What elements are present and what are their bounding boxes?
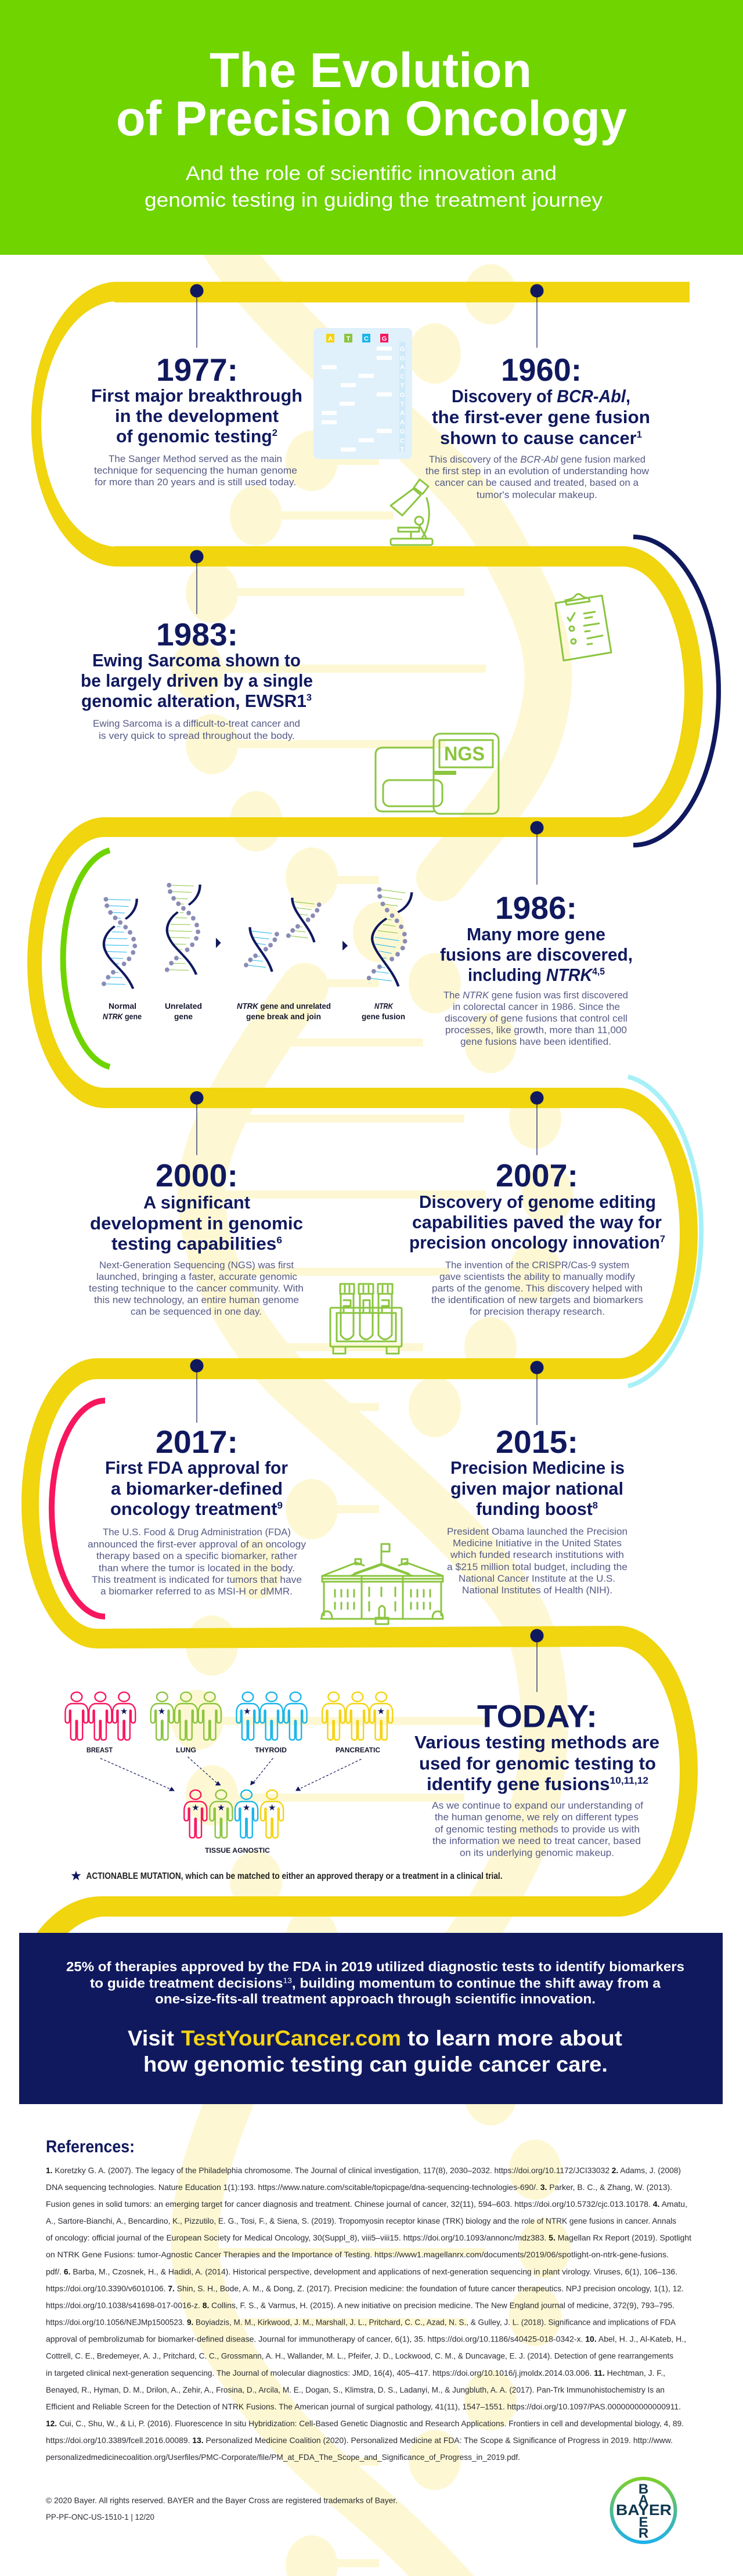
- diagram: NTRK gene fusion: Normal: [109, 1001, 136, 1011]
- references list: pdf/. 6. Barba, M., Czosnek, H., & Hadidi, A. (2014). Historical perspective, development and applications of next-generation sequencing in plant virology. Viruses, 6(1), 106–136.: [46, 2267, 677, 2276]
- references list: Benayed, R., Hyman, D. M., Drilon, A., Zehir, A., Frosina, D., Arcila, M. E., Dogan, S., Klimstra, D. S., Ladanyi, M., & Jungbluth, A. A. (2017). Pan-Trk Immunohistochemistry Is an: [46, 2385, 665, 2394]
- logo: Bayer: BAYER: [616, 2501, 672, 2519]
- panel: 2017: announced the first-ever approval of an oncology: [88, 1539, 306, 1550]
- references list: approval of pembrolizumab for biomarker-defined disease. Journal for immunotherapy of cancer, 6(1), 35. https://doi.org/10.1186/s40425-018-0342-x. 10. Abel, H. J., Al-Kateb, H.,: [46, 2335, 686, 2344]
- title: of Precision Oncology: [116, 91, 627, 146]
- icon: sequencing gel: C: [364, 335, 369, 342]
- accent arc: pink: [52, 1401, 105, 1617]
- panel: 1960: Discovery of BCR-Abl,: [452, 386, 630, 406]
- panel: 2017: than where the tumor is located in the body.: [99, 1563, 295, 1574]
- diagram: NTRK gene fusion: Unrelated: [165, 1001, 202, 1011]
- logo: Bayer: [612, 2478, 676, 2542]
- icon: sequencing gel: C: [400, 438, 405, 445]
- panel: 2015: Medicine Initiative in the United States: [453, 1538, 622, 1549]
- panel: 2007: capabilities paved the way for: [412, 1212, 662, 1232]
- panel: 1986: The NTRK gene fusion was first discovered: [443, 990, 628, 1001]
- panel: 1983: Ewing Sarcoma is a difficult-to-treat cancer and: [93, 719, 300, 729]
- panel: 2000: this new technology, an entire human genome: [94, 1295, 299, 1305]
- panel: 1977: [91, 352, 302, 488]
- panel: 1983: 3: [306, 692, 312, 703]
- references list: DNA sequencing technologies. Nature Education 1(1):193. https://www.nature.com/scitable/topicpage/dna-sequencing-technologies-690/. 3. Parker, B. C., & Zhang, W. (2013).: [46, 2182, 672, 2192]
- references list: Cottrell, C. E., Bredemeyer, A. J., Pritchard, C. C., Grossmann, A. H., Wallander, M. L., Pfeifer, J. D., Lockwood, C. M., & Duncavage, E. J. (2014). Detection of gene rearrangements: [46, 2351, 673, 2361]
- panel: 1960: the first step in an evolution of understanding how: [425, 466, 649, 477]
- footer legal text: [46, 2496, 398, 2521]
- panel: 2017: a biomarker referred to as MSI-H or dMMR.: [100, 1586, 293, 1597]
- panel: 1986: 4,5: [592, 966, 605, 977]
- panel: Today: identify gene fusions: [427, 1774, 607, 1794]
- diagram: NTRK gene fusion: gene: [174, 1012, 193, 1021]
- panel: Today: on its underlying genomic makeup.: [460, 1848, 614, 1859]
- panel: Today: used for genomic testing to: [419, 1753, 656, 1774]
- panel: 2015: which funded research institutions with: [450, 1550, 624, 1560]
- panel: 1977: The Sanger Method served as the main: [109, 454, 282, 464]
- panel: 2000: 2000:: [156, 1157, 238, 1193]
- footer legal text: © 2020 Bayer. All rights reserved. BAYER and the Bayer Cross are registered trademarks of Bayer.: [46, 2496, 398, 2505]
- icon: sequencing gel: G: [400, 392, 405, 399]
- panel: 2015: 8: [593, 1500, 598, 1511]
- panel: 1986: fusions are discovered,: [440, 944, 633, 965]
- panel: 2000: development in genomic: [90, 1213, 303, 1233]
- panel: 1960: cancer can be caused and treated, based on a: [435, 478, 639, 488]
- panel: 2007: gave scientists the ability to manually modify: [439, 1272, 636, 1282]
- diagram: tissue agnostic people: THYROID: [255, 1747, 287, 1754]
- panel: Today: of genomic testing methods to provide us with: [435, 1824, 640, 1835]
- icon: sequencing gel: A: [400, 410, 405, 417]
- panel: Today: 10,11,12: [610, 1775, 648, 1786]
- diagram: NTRK gene fusion: [102, 883, 412, 1021]
- references list: https://doi.org/10.1056/NEJMp1500523. 9. Boyiadzis, M. M., Kirkwood, J. M., Marshall, J. L., Pritchard, C. C., Azad, N. S., & Gulley, J. L. (2018). Significance and implications of FDA: [46, 2317, 676, 2326]
- panel: 1977: of genomic testing: [116, 426, 276, 446]
- panel: 2000: [89, 1157, 304, 1317]
- panel: 2017: a biomarker-defined: [111, 1478, 283, 1499]
- icon: sequencing gel: T: [401, 401, 405, 408]
- panel: 2007: parts of the genome. This discovery helped with: [432, 1283, 643, 1294]
- accent arc: cyan: [628, 1077, 701, 1386]
- panel: 1960: the first-ever gene fusion: [432, 407, 650, 427]
- diagram: tissue agnostic people: TISSUE AGNOSTIC: [205, 1848, 270, 1855]
- panel: 1986: gene fusions have been identified.: [460, 1037, 611, 1047]
- icon: NGS sequencer: NGS: [444, 743, 485, 765]
- diagram: tissue agnostic people: PANCREATIC: [336, 1747, 380, 1754]
- callout: navy banner: how genomic testing can guide cancer care.: [143, 2052, 608, 2076]
- callout: navy banner: 13: [283, 1976, 292, 1985]
- icon: test tube rack: [330, 1284, 402, 1354]
- icon: sequencing gel: T: [347, 335, 351, 342]
- icon: sequencing gel: A: [400, 364, 405, 371]
- callout: navy banner: to learn more about: [407, 2026, 622, 2050]
- panel: 2015: Precision Medicine is: [450, 1457, 625, 1478]
- panel: Today: TODAY:: [477, 1698, 597, 1734]
- panel: 2007: 2007:: [496, 1157, 578, 1193]
- panel: 2000: launched, bringing a faster, accurate genomic: [96, 1272, 297, 1282]
- panel: 2017: 2017:: [156, 1424, 238, 1460]
- background DNA helix: [171, 232, 574, 2576]
- references list: Fusion genes in solid tumors: an emerging target for cancer diagnosis and treatment. Chinese journal of cancer, 32(11), 594–603. https://doi.org/10.5732/cjc.013.10178. 4. Amatu,: [46, 2199, 687, 2209]
- panel: 2000: Next-Generation Sequencing (NGS) was first: [99, 1260, 294, 1271]
- logo: Bayer: E: [639, 2514, 648, 2530]
- diagram: NTRK gene fusion: NTRK gene and unrelated: [237, 1001, 331, 1011]
- subtitle: genomic testing in guiding the treatment journey: [145, 189, 603, 211]
- references list: Efficient and Reliable Screen for the Detection of NTRK Fusions. The American journal of surgical pathology, 41(11), 1547–1551. https://doi.org/10.1097/PAS.0000000000000911.: [46, 2402, 681, 2411]
- subtitle: And the role of scientific innovation and: [186, 163, 557, 185]
- icon: sequencing gel: A: [400, 419, 405, 426]
- panel: 1983: be largely driven by a single: [81, 670, 313, 691]
- icon: White House: [321, 1544, 443, 1624]
- references list: 1. Koretzky G. A. (2007). The legacy of the Philadelphia chromosome. The Journal of clinical investigation, 117(8), 2030–2032. https://doi.org/10.1172/JCI33032 2. Adams, J. (2008): [46, 2166, 681, 2175]
- panel: 2015: funding boost: [476, 1499, 596, 1519]
- panel: Today: [414, 1698, 659, 1859]
- panel: Today: Various testing methods are: [414, 1732, 659, 1752]
- panel: Today: As we continue to expand our understanding of: [432, 1801, 643, 1811]
- footer legal text: PP-PF-ONC-US-1510-1 | 12/20: [46, 2512, 154, 2521]
- icon: sequencing gel: A: [328, 335, 333, 342]
- panel: 1986: discovery of gene fusions that control cell: [445, 1013, 627, 1024]
- title: [116, 43, 627, 146]
- diagram: tissue agnostic people: BREAST: [86, 1747, 113, 1754]
- panel: 2000: testing capabilities: [111, 1233, 273, 1254]
- diagram: tissue agnostic people: LUNG: [176, 1747, 196, 1754]
- references list: [46, 2166, 691, 2462]
- references heading: References:: [46, 2137, 135, 2156]
- icon: sequencing gel: G: [382, 335, 387, 342]
- panel: 1977: for more than 20 years and is still used today.: [95, 477, 296, 488]
- panel: 2007: precision oncology innovation: [409, 1232, 670, 1253]
- diagram: NTRK gene fusion: gene fusion: [362, 1012, 405, 1021]
- panel: 1977: 2: [272, 427, 277, 438]
- title: The Evolution: [210, 43, 532, 98]
- panel: 2015: a $215 million total budget, including the: [447, 1562, 627, 1572]
- references list: A., Sartore-Bianchi, A., Bencardino, K., Pizzutilo, E. G., Tosi, F., & Siena, S. (2019). Tropomyosin receptor kinase (TRK) biology and the role of NTRK gene fusions in cancer. Annals: [46, 2216, 676, 2225]
- panel: 1983: Ewing Sarcoma shown to: [92, 650, 301, 670]
- panel: 1983: is very quick to spread throughout the body.: [99, 731, 295, 741]
- panel: 2017: therapy based on a specific biomarker, rather: [96, 1551, 298, 1561]
- panel: 1960: This discovery of the BCR-Abl gene fusion marked: [429, 454, 645, 465]
- panel: 1983: 1983:: [156, 616, 238, 652]
- panel: 1960: 1: [637, 429, 642, 440]
- references list: in targeted clinical next-generation sequencing. The Journal of molecular diagnostics: JMD, 16(4), 405–417. https://doi.org/10.1016/j.jmoldx.2014.03.006. 11. Hechtman, J. F.,: [46, 2368, 665, 2377]
- logo: Bayer: B: [639, 2481, 648, 2497]
- callout: navy banner: to guide treatment decisions: [90, 1976, 272, 1991]
- callout: navy banner: one-size-fits-all treatment approach through scientific innovation.: [155, 1991, 596, 2006]
- panel: 1986: in colorectal cancer in 1986. Since the: [453, 1002, 620, 1012]
- panel: 2007: 7: [660, 1233, 665, 1244]
- panel: 2017: 9: [277, 1500, 283, 1511]
- accent arc: navy: [633, 537, 719, 845]
- panel: 2017: [88, 1424, 306, 1597]
- panel: 1983: [81, 616, 313, 741]
- panel: Today: the human genome, we rely on different types: [435, 1812, 639, 1823]
- panel: 1977: First major breakthrough: [91, 385, 302, 406]
- diagram: NTRK gene fusion: gene break and join: [246, 1012, 321, 1021]
- icon: sequencing gel: G: [400, 428, 405, 435]
- panel: 2007: for precision therapy research.: [470, 1307, 605, 1317]
- panel: 2015: given major national: [450, 1478, 623, 1499]
- panel: 2017: This treatment is indicated for tumors that have: [92, 1575, 302, 1585]
- references list: https://doi.org/10.3390/v6010106. 7. Shin, S. H., Bode, A. M., & Dong, Z. (2017). Precision medicine: the foundation of future cancer therapeutics. NPJ precision oncology, 1(1), 12.: [46, 2283, 684, 2293]
- references list: https://doi.org/10.1038/s41698-017-0016-z. 8. Collins, F. S., & Varmus, H. (2015). A new initiative on precision medicine. The New England journal of medicine, 372(9), 793–795.: [46, 2301, 675, 2310]
- panel: 1960: tumor's molecular makeup.: [477, 490, 597, 500]
- icon: sequencing gel: G: [400, 355, 405, 362]
- panel: 2015: National Institutes of Health (NIH).: [462, 1585, 612, 1596]
- logo: Bayer: A: [639, 2492, 648, 2508]
- panel: 2017: First FDA approval for: [105, 1457, 288, 1478]
- references list: on NTRK Gene Fusions: tumor-Agnostic Cancer Therapies and the Importance of Testing. https://www1.magellanrx.com/documents/2019/06/spotlight-on-ntrk-gene-fusions.: [46, 2250, 669, 2259]
- panel: 2000: 6: [276, 1235, 282, 1246]
- panel: 2007: The invention of the CRISPR/Cas-9 system: [445, 1260, 629, 1271]
- icon: sequencing gel: C: [400, 373, 405, 380]
- panel: 1960: 1960:: [501, 352, 582, 388]
- logo: Bayer: R: [639, 2526, 648, 2541]
- icon: sequencing gel: T: [401, 446, 405, 453]
- panel: 1977: 1977:: [156, 352, 238, 388]
- panel: 1986: Many more gene: [467, 924, 605, 944]
- references list: personalizedmedicinecoalition.org/Userfiles/PMC-Corporate/file/PM_at_FDA_The_Scope_and_Significance_of_Progress_in_2019.pdf.: [46, 2452, 520, 2462]
- callout: navy banner: Visit: [128, 2026, 174, 2050]
- panel: 1977: technique for sequencing the human genome: [94, 466, 297, 476]
- icon: clipboard: [556, 594, 611, 661]
- panel: 2007: Discovery of genome editing: [419, 1192, 656, 1212]
- diagram: NTRK gene fusion: NTRK gene: [103, 1012, 142, 1021]
- panel: 1986: processes, like growth, more than 11,000: [445, 1025, 627, 1036]
- panel: 1960: shown to cause cancer: [440, 428, 638, 448]
- subtitle: [145, 163, 603, 211]
- timeline track: [21, 282, 703, 1944]
- panel: 2000: can be sequenced in one day.: [131, 1307, 262, 1317]
- panel: 1986: 1986:: [495, 890, 577, 926]
- diagram: tissue agnostic people: [65, 1692, 392, 1855]
- panel: Today: the information we need to treat cancer, based: [432, 1836, 641, 1846]
- panel: 1977: in the development: [115, 406, 279, 426]
- diagram: NTRK gene fusion: NTRK: [374, 1001, 394, 1011]
- panel: 2000: testing technique to the cancer community. With: [89, 1283, 304, 1294]
- panel: 2015: 2015:: [496, 1424, 578, 1460]
- panel: 2017: The U.S. Food & Drug Administration (FDA): [103, 1527, 291, 1538]
- panel: 2000: A significant: [143, 1192, 250, 1213]
- panel: 2007: the identification of new targets and biomarkers: [431, 1295, 643, 1305]
- references list: 12. Cui, C., Shu, W., & Li, P. (2016). Fluorescence In situ Hybridization: Cell-Based Genetic Diagnostic and Research Applications. Frontiers in cell and developmental biology, 4, 89.: [46, 2419, 684, 2428]
- callout: navy banner: [19, 1933, 723, 2104]
- panel: 1986: including NTRK: [468, 965, 596, 985]
- icon: sequencing gel: G: [400, 346, 405, 353]
- callout: navy banner: 25% of therapies approved by the FDA in 2019 utilized diagnostic tests to identify biomarkers: [66, 1959, 684, 1974]
- panel: 2015: President Obama launched the Precision: [447, 1527, 627, 1537]
- icon: sequencing gel: [313, 328, 412, 459]
- callout: navy banner: , building momentum to continue the shift away from a: [292, 1976, 661, 1991]
- icon: microscope: [391, 479, 432, 545]
- timeline pins: [190, 284, 543, 1692]
- panel: 2015: [447, 1424, 627, 1596]
- panel: 1960: [425, 352, 650, 500]
- icon: sequencing gel: T: [401, 383, 405, 389]
- references list: of oncology: official journal of the European Society for Medical Oncology, 30(Suppl_8), viii5–viii15. https://doi.org/10.1093/annonc/mdz383. 5. Magellan Rx Report (2019). Spotlight: [46, 2233, 691, 2242]
- panel: 2017: oncology treatment: [110, 1499, 277, 1519]
- header banner: [0, 0, 743, 255]
- panel: 2015: National Cancer Institute at the U.S.: [459, 1574, 615, 1584]
- icon: NGS sequencer: [376, 734, 499, 814]
- panel: 2007: [409, 1157, 665, 1317]
- references list: https://doi.org/10.3389/fcell.2016.00089. 13. Personalized Medicine Coalition (2020). Personalized Medicine at FDA: The Scope & Significance of Progress in 2019. http://www.: [46, 2436, 673, 2445]
- accent arc: green: [63, 850, 110, 1067]
- panel: 1983: genomic alteration, EWSR1: [81, 691, 315, 711]
- callout: navy banner: TestYourCancer.com: [181, 2026, 401, 2050]
- panel: 1986: [440, 890, 633, 1047]
- legend: actionable mutation: ACTIONABLE MUTATION, which can be matched to either an approved therapy or a treatment in a clinical trial.: [86, 1871, 503, 1881]
